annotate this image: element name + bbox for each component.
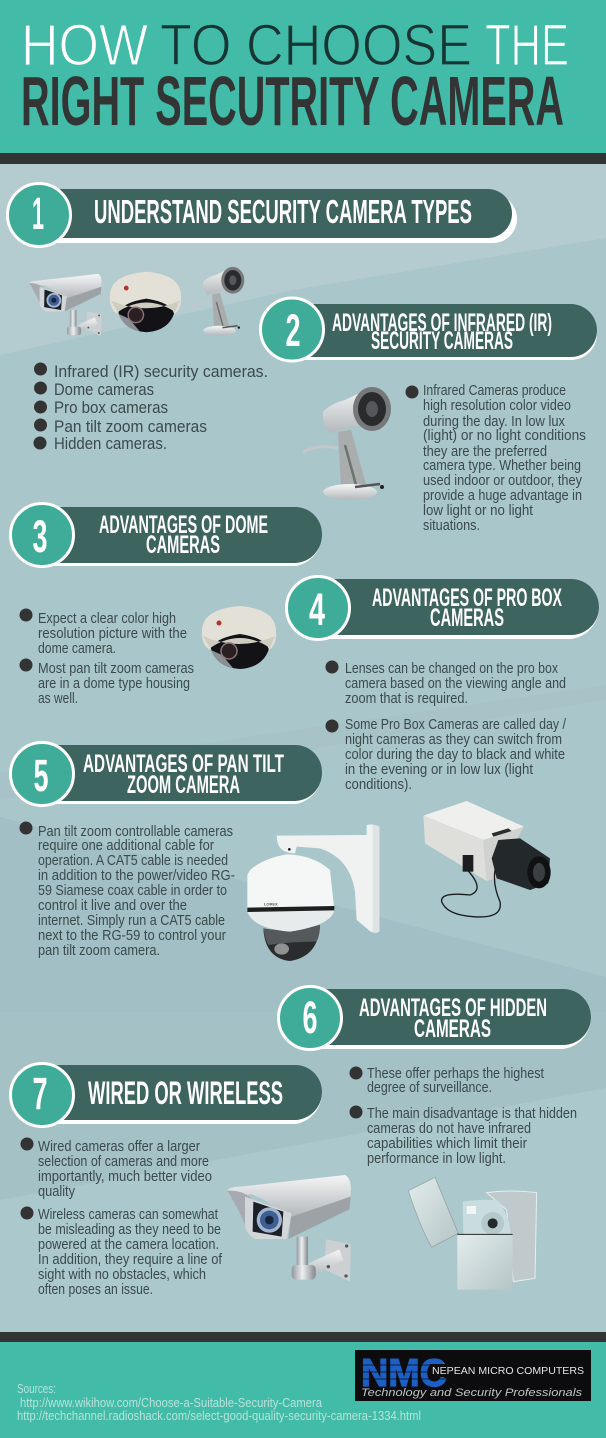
section 7 text: often poses an issue. — [38, 1281, 153, 1298]
icon: wired housed camera — [227, 1175, 351, 1282]
section 7 text: quality — [38, 1183, 75, 1200]
section 5 text: internet. Simply run a CAT5 cable — [38, 912, 225, 929]
section 1 list: Infrared (IR) security cameras. — [54, 362, 268, 381]
section 3 text: as well. — [38, 690, 78, 707]
section 3 heading — [10, 504, 322, 566]
section 6 text: capabilities which limit their — [367, 1135, 527, 1152]
section 2 text: during the day. In low lux — [423, 413, 565, 430]
section 7 heading: WIRED OR WIRELESS — [88, 1075, 283, 1111]
section 2 heading: 2 — [286, 305, 300, 356]
section 3 heading: ADVANTAGES OF DOME — [99, 511, 268, 539]
section 5 text: Pan tilt zoom controllable cameras — [38, 823, 233, 840]
section 4 text — [326, 660, 567, 793]
section 2 text: (light) or no light conditions — [423, 427, 586, 444]
section 4 text: in the evening or in low lux (light — [345, 761, 534, 778]
icon: infrared bullet camera — [303, 387, 391, 500]
section 1 list: Pro box cameras — [54, 398, 168, 417]
section 3 text: are in a dome type housing — [38, 675, 190, 692]
section 3 text: Expect a clear color high — [38, 610, 176, 627]
section 7 heading: 7 — [32, 1068, 48, 1119]
footer band — [0, 1332, 606, 1438]
title: TO CHOOSE — [160, 13, 472, 78]
section 4 text: zoom that is required. — [345, 690, 468, 707]
header band — [0, 0, 606, 164]
section 4 text: Lenses can be changed on the pro box — [345, 660, 558, 677]
section 5 text: next to the RG-59 to control your — [38, 927, 226, 944]
icon: pan tilt zoom camera — [247, 824, 379, 961]
section 5 text: operation. A CAT5 cable is needed — [38, 852, 228, 869]
section 5 text: require one additional cable for — [38, 837, 214, 854]
section 3 text: dome camera. — [38, 640, 116, 657]
section 3 heading: CAMERAS — [146, 531, 220, 559]
section 6 text: degree of surveillance. — [367, 1079, 492, 1096]
section 6 text: cameras do not have infrared — [367, 1120, 531, 1137]
section 7 text: Wired cameras offer a larger — [38, 1138, 200, 1155]
logo: Nepean Micro Computers: NEPEAN MICRO COMPUTERS — [432, 1366, 584, 1377]
section 2 text: they are the preferred — [423, 443, 547, 460]
title: HOW — [21, 13, 148, 78]
section 5 text: pan tilt zoom camera. — [38, 942, 160, 959]
section 2 text: camera type. Whether being — [423, 457, 581, 474]
section 6 text — [350, 1065, 577, 1167]
section 6 text: These offer perhaps the highest — [367, 1065, 545, 1082]
section 6 heading: 6 — [302, 992, 318, 1043]
section 4 text: Some Pro Box Cameras are called day / — [345, 716, 567, 733]
logo: Nepean Micro Computers: NMC — [361, 1352, 447, 1395]
icon: bullet camera — [191, 267, 244, 336]
sources: Sources: — [17, 1381, 56, 1396]
icon: dome camera — [202, 606, 276, 669]
section 5 text — [20, 822, 235, 959]
section 2 text: used indoor or outdoor, they — [423, 472, 582, 489]
icon: hidden lighter camera — [408, 1177, 537, 1290]
title: THE — [485, 13, 569, 78]
section 7 text — [20, 1138, 223, 1298]
section 6 heading: CAMERAS — [414, 1015, 491, 1043]
section 7 text: importantly, much better video — [38, 1168, 212, 1185]
section 4 heading: CAMERAS — [430, 604, 504, 632]
section 2 text: Infrared Cameras produce — [423, 382, 566, 399]
section 2 text — [406, 382, 586, 534]
section 1 heading: 1 — [32, 188, 44, 239]
section 1 heading — [8, 184, 517, 246]
icon: pan tilt zoom camera: LOREX — [264, 902, 278, 907]
icon: dome camera — [110, 272, 181, 332]
logo: Nepean Micro Computers: Technology and Security Professionals — [361, 1387, 583, 1399]
section 4 text: camera based on the viewing angle and — [345, 675, 566, 692]
sources: http://techchannel.radioshack.com/select-good-quality-security-camera-1334.html — [17, 1408, 421, 1423]
section 2 heading — [260, 298, 597, 361]
section 3 text — [20, 608, 194, 707]
section 4 text: night cameras as they can switch from — [345, 731, 562, 748]
section 2 text: situations. — [423, 517, 480, 534]
title — [21, 13, 569, 140]
section 7 text: powered at the camera location. — [38, 1236, 219, 1253]
logo: Nepean Micro Computers — [355, 1350, 591, 1401]
section 1 list: Dome cameras — [54, 380, 154, 399]
section 2 text: high resolution color video — [423, 397, 571, 414]
section 7 text: be misleading as they need to be — [38, 1221, 221, 1238]
section 7 text: selection of cameras and more — [38, 1153, 209, 1170]
section 1 list: Pan tilt zoom cameras — [54, 417, 207, 436]
section 6 heading — [278, 986, 591, 1050]
camera photos row — [29, 267, 244, 336]
section 1 list — [34, 362, 268, 453]
sources — [17, 1381, 421, 1423]
icon: housed camera — [29, 274, 102, 336]
section 3 heading: 3 — [32, 511, 48, 562]
section 5 text: control it live and over the — [38, 897, 187, 914]
section 7 text: In addition, they require a line of — [38, 1251, 223, 1268]
section 5 heading: 5 — [34, 750, 48, 801]
section 5 heading: ZOOM CAMERA — [127, 771, 240, 799]
section 7 heading — [10, 1064, 322, 1126]
section 4 heading: 4 — [309, 584, 325, 635]
section 4 text: color during the day to black and white — [345, 746, 565, 763]
section 5 text: in addition to the power/video RG- — [38, 867, 235, 884]
section 6 text: performance in low light. — [367, 1150, 506, 1167]
icon: pro box camera — [423, 801, 551, 917]
section 2 text: low light or no light — [423, 502, 534, 519]
section 1 list: Hidden cameras. — [54, 434, 167, 453]
sources: http://www.wikihow.com/Choose-a-Suitable-Security-Camera — [20, 1395, 323, 1410]
section 7 text: sight with no obstacles, which — [38, 1266, 206, 1283]
section 3 text: resolution picture with the — [38, 625, 187, 642]
section 4 heading — [286, 576, 599, 640]
section 7 text: Wireless cameras can somewhat — [38, 1206, 219, 1223]
section 4 text: conditions). — [345, 776, 412, 793]
section 3 text: Most pan tilt zoom cameras — [38, 660, 194, 677]
section 5 heading — [10, 742, 322, 806]
section 5 heading: ADVANTAGES OF PAN TILT — [83, 750, 284, 778]
section 5 text: 59 Siamese coax cable in order to — [38, 882, 227, 899]
